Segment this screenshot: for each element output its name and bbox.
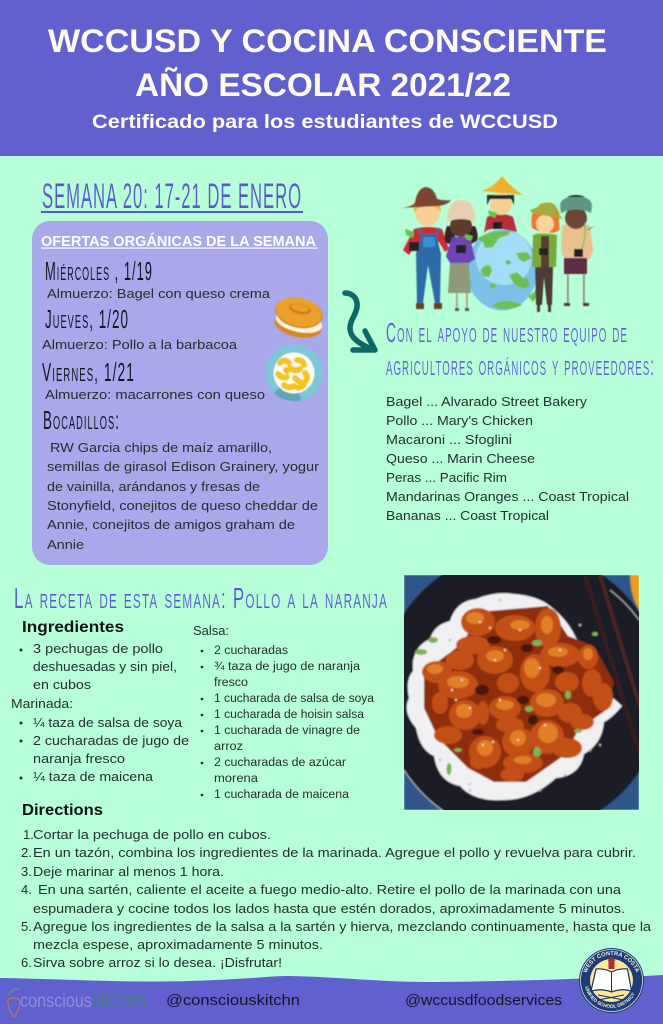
title line 2: AÑO ESCOLAR 2021/22 [135,67,511,103]
sauce column [193,624,375,801]
friday lunch: Almuerzo: macarrones con queso [45,387,265,402]
logo: school district seal: UNIFIED SCHOOL DISTRICT [586,986,634,1008]
ingredients column [11,619,189,784]
directions [21,802,652,970]
arrow: curving to suppliers [345,293,375,350]
directions steps: 1. [23,827,34,842]
logo: school district seal [579,948,644,1013]
sauce column: 1 cucharada de hoisin salsa [214,709,365,721]
snacks text [47,440,320,552]
logo: school district seal: WEST CONTRA COSTA [583,951,640,972]
ingredients column: naranja fresco [33,751,125,766]
friday heading: Viernes, 1/21 [42,357,135,387]
sauce column: Salsa: [193,624,229,638]
recipe heading: La receta de esta semana: Pollo a la naranja [14,583,388,615]
snacks text: Annie, conejitos de amigos graham de [47,517,295,532]
sauce column: fresco [214,677,248,689]
wednesday lunch: Almuerzo: Bagel con queso crema [47,286,271,301]
farmer 3: conical straw hat [481,176,523,233]
directions steps: 4. [21,882,32,897]
panel: weekly organic offerings [32,221,328,565]
directions steps: 5. [21,919,32,934]
directions steps: En un tazón, combina los ingredientes de la marinada. Agregue el pollo y revuelva para cubrir. [33,845,636,860]
suppliers list: Macaroni ... Sfoglini [386,432,512,447]
snacks text: semillas de girasol Edison Grainery, yogur [47,459,320,474]
directions steps: Agregue los ingredientes de la salsa a la sartén y hierva, mezclando continuamente, hasta que la [33,919,652,934]
panel heading: OFERTAS ORGÁNICAS DE LA SEMANA [41,233,317,250]
header banner [0,0,663,156]
photo: orange chicken over rice [404,575,639,810]
directions steps: Cortar la pechuga de pollo en cubos. [33,827,271,842]
sauce column: arroz [214,741,243,753]
directions steps: 3. [21,864,32,879]
sauce column: 2 cucharadas de azúcar [214,757,346,769]
ingredients column: ¼ taza de salsa de soya [33,715,183,730]
suppliers list: Peras ... Pacific Rim [386,470,507,485]
text: SEMANA 20: 17-21 DE ENERO [42,177,302,216]
suppliers list: Bagel ... Alvarado Street Bakery [386,394,588,409]
suppliers list [386,394,629,523]
farmer 1: overalls and brown hat [401,187,451,309]
snacks text: Stonyfield, conejitos de queso cheddar de [47,498,318,513]
subtitle: Certificado para los estudiantes de WCCUSD [92,111,558,133]
footer band [0,948,663,1024]
social handle: conscious kitchen: @consciouskitchn [166,992,300,1009]
ingredients column: ¼ taza de maicena [33,769,154,784]
sauce column: ¾ taza de jugo de naranja [214,661,361,673]
globe [466,230,538,310]
icon: macaroni and cheese [266,344,322,402]
suppliers list: Mandarinas Oranges ... Coast Tropical [386,489,629,504]
ingredients column: 3 pechugas de pollo [33,641,163,656]
directions steps: En una sartén, caliente el aceite a fuego medio-alto. Retire el pollo de la marinada con una [38,882,622,897]
thursday lunch: Almuerzo: Pollo a la barbacoa [42,337,238,352]
snacks text: de vainilla, arándanos y fresas de [47,479,260,494]
logo: conscious kitchen: kitchen [92,989,146,1012]
suppliers heading [386,317,655,381]
ingredients column: Marinada: [11,696,73,711]
farmer 4: green hat and vest [530,202,563,312]
directions steps [21,827,652,970]
directions steps: 2. [21,845,32,860]
ingredients column: 2 cucharadas de jugo de [33,733,189,748]
directions steps: 6. [21,955,32,970]
snacks heading: Bocadillos: [43,405,120,435]
suppliers list: Bananas ... Coast Tropical [386,508,549,523]
logo: conscious kitchen: conscious [20,991,92,1012]
thursday heading: Jueves, 1/20 [45,304,129,334]
icon: bagel [272,293,326,342]
farmer 5: turban and tan shirt [560,195,594,306]
snacks text: RW Garcia chips de maíz amarillo, [50,440,272,455]
directions heading: Directions [22,802,103,819]
sauce column: 1 cucharada de vinagre de [214,725,360,737]
sauce column: 1 cucharada de maicena [214,789,350,801]
directions steps: Deje marinar al menos 1 hora. [33,864,224,879]
sauce column: 2 cucharadas [214,645,288,657]
farmer 2: beanie and purple top [445,200,478,311]
sauce column: 1 cucharada de salsa de soya [214,693,375,705]
logo: conscious kitchen [8,989,146,1017]
directions steps: Sirva sobre arroz si lo desea. ¡Disfrutar! [33,955,282,970]
illustration: farmers around globe [401,176,594,312]
snacks text: Annie [47,537,84,552]
directions steps: espumadera y cocine todos los lados hasta que estén dorados, aproximadamente 5 minutos. [33,901,625,916]
ingredients column: en cubos [33,677,92,692]
panel: weekly organic offerings: Miércoles , 1/19 [45,256,153,286]
ingredients column: deshuesadas y sin piel, [33,659,177,674]
social handle: food services: @wccusdfoodservices [405,992,562,1009]
suppliers list: Queso ... Marin Cheese [386,451,535,466]
directions steps: mezcla espese, aproximadamente 5 minutos. [33,937,323,952]
ingredients heading: Ingredientes [22,619,124,636]
suppliers list: Pollo ... Mary's Chicken [386,413,533,428]
title line 1: WCCUSD Y COCINA CONSCIENTE [48,23,607,59]
sauce column: morena [214,773,259,785]
